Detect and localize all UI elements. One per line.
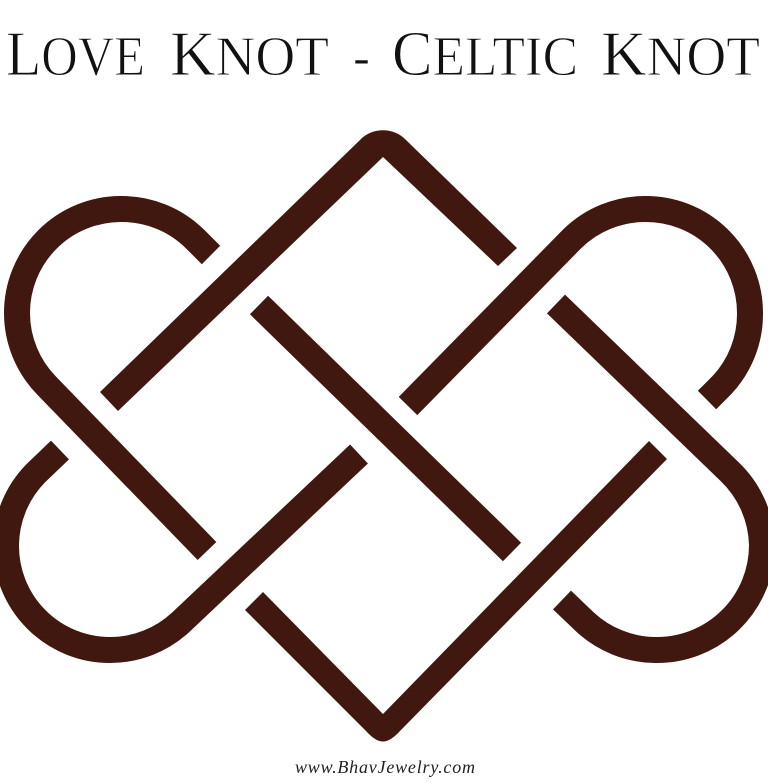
- title: CELTIC: [392, 18, 578, 89]
- strand: lower right loop: [556, 304, 762, 650]
- title: KNOT: [170, 18, 329, 89]
- title: [6, 18, 760, 89]
- icon: love knot: [6, 130, 762, 742]
- title: LOVE: [6, 18, 145, 89]
- strand: top chevron: [100, 130, 517, 411]
- strand: centre diagonal: [259, 305, 512, 552]
- strand: lower left loop: [6, 450, 359, 650]
- strand: upper right loop: [408, 209, 750, 406]
- title: -: [353, 26, 370, 88]
- strand: upper left loop: [17, 209, 211, 551]
- strand: bottom chevron: [245, 441, 667, 742]
- title: KNOT: [601, 18, 760, 89]
- website credit: www.BhavJewelry.com: [295, 757, 475, 777]
